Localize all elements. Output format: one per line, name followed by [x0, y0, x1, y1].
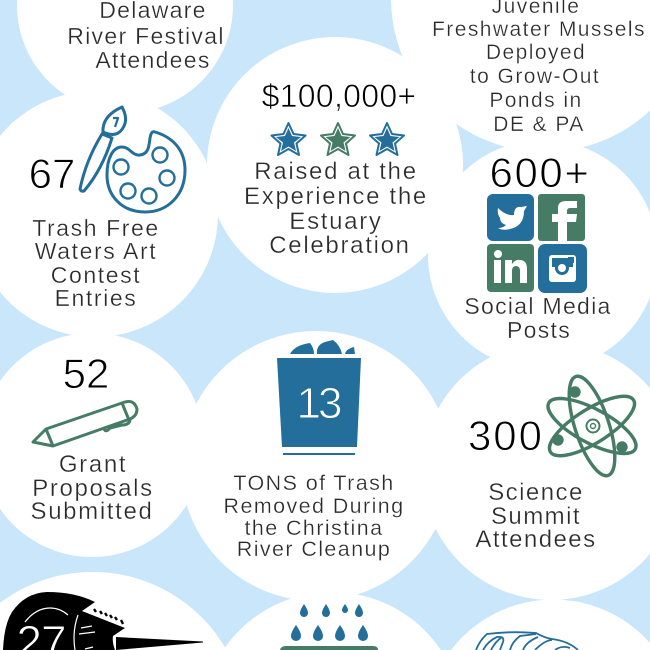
fundraising label: Celebration — [269, 232, 411, 259]
trash number: 13 — [297, 379, 341, 428]
trash label: TONS of Trash — [233, 471, 395, 495]
trash label: Removed During — [224, 494, 404, 518]
icon: trash bucket — [277, 340, 361, 455]
fundraising label: Estuary — [289, 208, 383, 235]
panel: trash removed — [181, 331, 451, 601]
river festival label: Attendees — [95, 47, 211, 73]
icon: twitter — [487, 194, 534, 241]
panel: oyster — [451, 599, 650, 650]
grants number: 52 — [63, 350, 109, 397]
art contest number: 67 — [29, 150, 75, 197]
art contest label: Contest — [51, 262, 141, 288]
panel: freshwater mussels — [391, 0, 650, 152]
icon: oyster shell — [476, 632, 578, 650]
icon: pen — [33, 401, 137, 446]
art contest label: Trash Free — [32, 215, 160, 241]
art contest label: Entries — [55, 285, 137, 311]
panel: science summit — [422, 342, 650, 600]
grants label: Grant — [59, 451, 127, 478]
panel: social media — [428, 140, 650, 370]
panel: celebration fundraising — [207, 37, 463, 293]
mussels label: to Grow-Out — [470, 65, 600, 88]
social media label: Social Media — [464, 293, 612, 319]
summit number: 300 — [468, 412, 544, 459]
mussels label: DE & PA — [493, 113, 585, 136]
summit label: Attendees — [475, 526, 597, 553]
social media number: 600+ — [489, 149, 591, 196]
trash label: the Christina — [245, 516, 383, 540]
river festival label: River Festival — [67, 23, 225, 49]
art contest label: Waters Art — [35, 238, 157, 264]
trash label: River Cleanup — [237, 537, 391, 561]
icon: brush and palette — [80, 107, 185, 212]
icon: instagram — [538, 244, 587, 293]
icon: linkedin — [487, 244, 534, 292]
fundraising number: $100,000+ — [262, 78, 416, 114]
social media label: Posts — [507, 317, 571, 343]
icon: horseshoe crab — [3, 592, 203, 650]
grants label: Proposals — [32, 475, 154, 502]
panel: horseshoe crab — [0, 572, 226, 650]
icon: rain drops — [280, 604, 378, 650]
mussels label: Deployed — [486, 41, 586, 64]
mussels label: Freshwater Mussels — [432, 18, 646, 41]
fundraising label: Raised at the — [254, 158, 418, 185]
grants label: Submitted — [31, 498, 153, 525]
icon: three stars — [272, 123, 404, 155]
panel: art contest — [0, 91, 218, 337]
icon: facebook — [538, 194, 585, 241]
fundraising label: Experience the — [244, 183, 428, 210]
mussels label: Ponds in — [489, 89, 583, 112]
summit label: Summit — [491, 503, 581, 530]
panel: rain — [223, 592, 441, 650]
icon: atom — [541, 371, 643, 481]
panel: grant proposals — [0, 333, 204, 557]
summit label: Science — [488, 479, 584, 506]
panel: river festival — [17, 0, 233, 113]
